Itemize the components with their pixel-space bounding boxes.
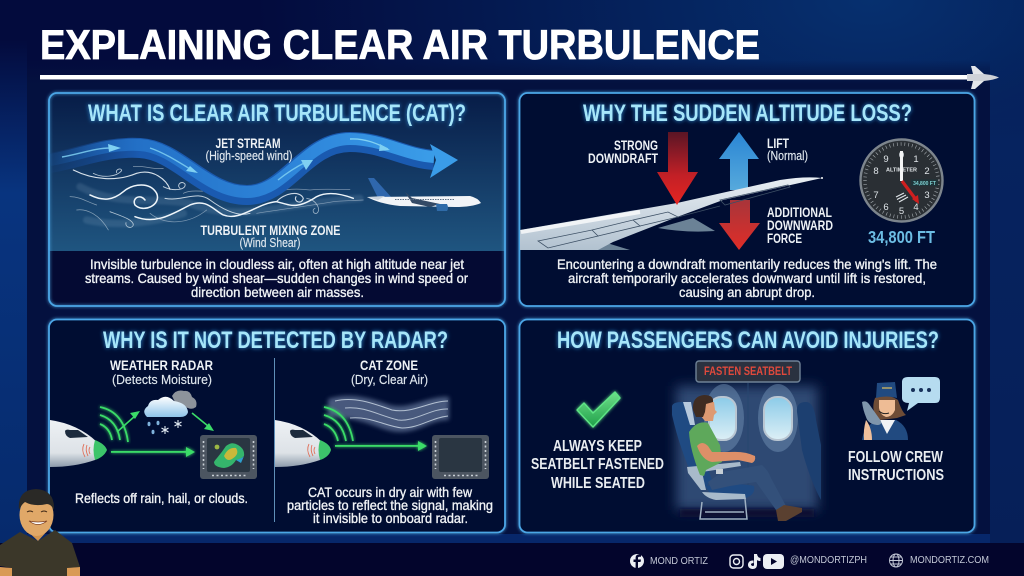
arrow: radar passes through [335,441,427,451]
icon: youtube [763,554,784,569]
icon: altimeter gauge: 6 [883,202,889,213]
icon: radar waves, weather radar [100,407,128,442]
label: jet stream: (High-speed wind) [206,149,292,163]
icon: flight attendant [862,382,908,440]
panel: why not detected by radar [49,320,505,532]
text: follow crew instructions: FOLLOW CREW [848,449,944,466]
label: turbulent mixing zone: TURBULENT MIXING ZONE [200,223,340,238]
heading: altitude loss: WHY THE SUDDEN ALTITUDE LOSS? [583,100,912,127]
label: cat zone: (Dry, Clear Air) [351,373,428,387]
icon: radar display with weather [200,435,257,479]
text: follow crew instructions: INSTRUCTIONS [848,467,944,484]
icon: radar waves, CAT zone [324,407,353,441]
text: CAT description: streams. Caused by wind shear—sudden changes in wind speed or [85,270,468,286]
arrow: strong downdraft [657,132,698,205]
icon: altimeter gauge: 9 [883,154,889,165]
label: cat zone [351,358,428,387]
text: CAT occurs in dry air [287,484,493,526]
label: lift: (Normal) [767,149,808,163]
footer bar [0,543,1024,576]
panel: what is clear air turbulence [49,93,505,306]
text: altitude loss description [557,256,937,300]
icon: altimeter gauge: 1 [913,154,919,165]
label: jet stream: JET STREAM [216,136,280,151]
icon: dry air wind band [328,396,449,432]
heading: radar: WHY IS IT NOT DETECTED BY RADAR? [103,327,448,354]
icon: instagram [730,555,743,568]
arrow: lift [719,132,759,190]
text: altitude loss description: Encountering a downdraft momentarily reduces the wing's lift. The [557,256,937,272]
text: CAT description: direction between air masses. [191,284,364,300]
icon: airliner [367,178,481,211]
chart: jet stream arrow [50,139,458,195]
icon: cabin windows [704,384,798,452]
label: additional downward force: DOWNWARD [767,218,833,233]
arrow: radar to cloud [117,411,140,432]
icon: wing [520,177,823,250]
label: strong downdraft: STRONG [614,138,658,153]
portrait: presenter [0,489,80,576]
text: handle: @MONDORTIZPH [790,554,867,566]
text: CAT description: Invisible turbulence in cloudless air, often at high altitude near jet [90,256,464,272]
text: always keep seatbelt fastened: ALWAYS KEEP [553,438,642,455]
label: weather radar [110,358,213,387]
label: strong downdraft: DOWNDRAFT [588,151,659,166]
icon: tiktok [748,554,760,569]
sign: fasten seatbelt [696,361,800,382]
icon: altimeter gauge: ALTIMETER [886,168,917,174]
text: always keep seatbelt fastened [531,438,664,492]
text: reflects off rain: Reflects off rain, hail, or clouds. [75,490,248,506]
label: cat zone: CAT ZONE [360,358,418,373]
heading: what is CAT: WHAT IS CLEAR AIR TURBULENCE (CAT)? [88,100,466,127]
text: always keep seatbelt fastened: SEATBELT FASTENED [531,456,664,473]
icon: altimeter gauge [860,140,942,222]
icon: storm cloud with rain and snow [144,391,196,434]
text: always keep seatbelt fastened: WHILE SEATED [551,475,645,492]
icon: passenger [689,395,802,521]
label: strong downdraft [588,138,659,166]
label: lift: LIFT [767,136,790,151]
text: altitude loss description: aircraft temporarily accelerates downward until lift is restored, [568,270,926,286]
icon: altimeter gauge: 5 [899,206,904,217]
label: additional downward force [767,205,833,246]
label: additional downward force: FORCE [767,231,802,246]
arrow: nose to display [111,447,195,457]
icon: green check mark [577,392,620,427]
footer: social handles [630,554,989,569]
value: altitude: 34,800 FT [868,227,935,247]
text: CAT occurs in dry air: it invisible to onboard radar. [313,510,468,526]
text: CAT description [85,256,468,300]
divider [274,358,275,522]
sign: fasten seatbelt: FASTEN SEATBELT [704,364,793,378]
icon: aircraft nose, CAT zone [275,420,331,467]
panel: why the sudden altitude loss [520,93,974,306]
label: turbulent mixing zone: (Wind Shear) [240,236,300,250]
icon: blank radar display [432,435,489,479]
text: website: MONDORTIZ.COM [910,554,989,566]
icon: altimeter gauge: 0 [899,150,904,161]
label: weather radar: WEATHER RADAR [110,358,213,373]
icon: altimeter gauge: 4 [913,202,919,213]
icon: facebook [630,554,644,568]
text: altitude loss description: causing an abrupt drop. [679,284,815,300]
icon: speech bubble [902,377,940,411]
arrow: cloud to display [192,413,214,431]
text: follow crew instructions [848,449,944,484]
text: CAT occurs in dry air: particles to reflect the signal, making [287,497,493,513]
main title: EXPLAINING CLEAR AIR TURBULENCE [40,21,760,68]
chart: turbulent mixing zone swirls [70,166,363,230]
icon: altimeter gauge: 2 [924,166,930,177]
icon: jet silhouette on rule [967,66,999,89]
label: lift [767,136,808,163]
icon: globe [890,554,902,567]
label: additional downward force: ADDITIONAL [767,205,832,220]
label: weather radar: (Detects Moisture) [112,373,212,387]
panel: how passengers can avoid injuries [520,320,974,532]
text: facebook name: MOND ORTIZ [650,555,709,567]
label: jet stream [206,136,292,163]
icon: altimeter gauge: 7 [873,190,879,201]
icon: front seat [797,402,821,500]
icon: passenger seat [672,402,754,519]
illustration: seated passenger in cabin [672,383,821,521]
text: CAT occurs in dry air: CAT occurs in dry air with few [308,484,473,500]
icon: altimeter gauge: 8 [873,166,879,177]
label: turbulent mixing zone [200,223,340,250]
title rule [40,75,968,80]
icon: altimeter gauge: 3 [924,190,930,201]
arrow: additional downward force [719,200,760,250]
icon: aircraft nose, weather radar [50,420,107,467]
icon: altimeter gauge: 34,800 FT [913,181,936,187]
